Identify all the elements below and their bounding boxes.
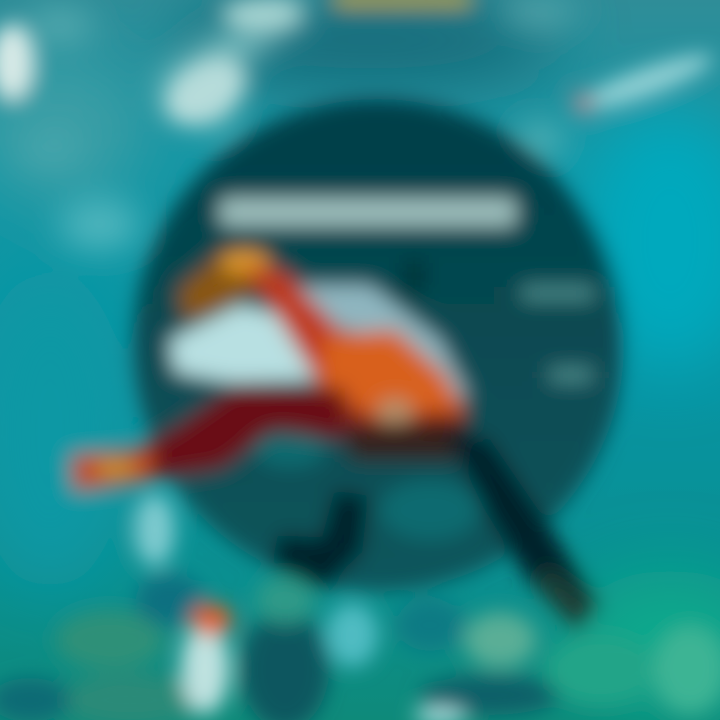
background: coral reef (0, 494, 720, 720)
turtle shell (320, 330, 465, 440)
turtle front flipper (135, 386, 345, 480)
background: light patches at the surface (20, 0, 580, 251)
decorative dark mark above the turtle (404, 260, 424, 294)
turtle dark lower flipper (272, 490, 368, 590)
lighter water inside the circle (380, 480, 480, 540)
turtle head (178, 250, 270, 322)
turtle neck (245, 265, 345, 395)
heading: illegible blurred title (220, 198, 516, 226)
text block: illegible blurred side labels (522, 286, 594, 382)
background: bright highlights (0, 24, 34, 100)
illustration: sea turtle (72, 250, 600, 632)
turtle rear flipper (445, 428, 600, 632)
panel: dark circle (132, 99, 624, 591)
turtle underbelly (345, 420, 470, 460)
light patch behind the turtle (170, 305, 320, 382)
